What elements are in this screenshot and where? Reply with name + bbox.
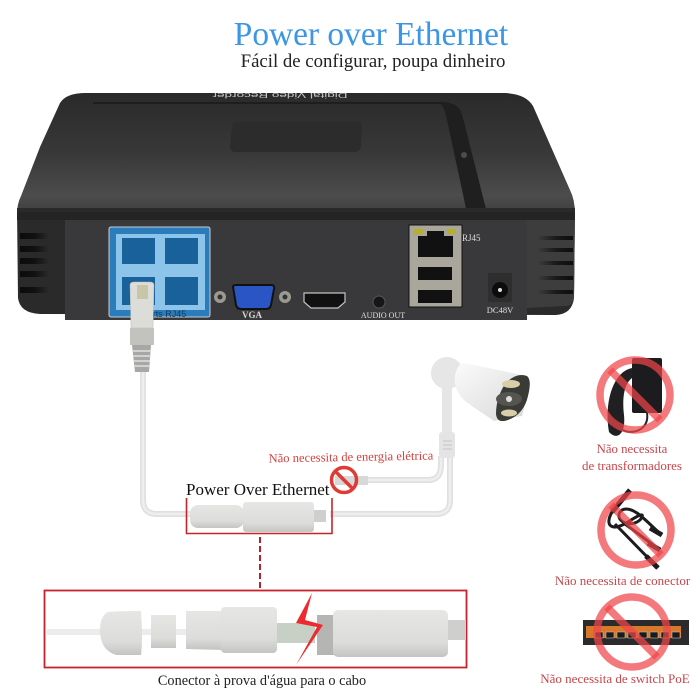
VGA label: VGA [242, 310, 262, 320]
RJ45 plug [130, 282, 154, 372]
icon: splitter cable [609, 490, 662, 568]
recorder back face [65, 220, 527, 320]
waterproof connector panel [44, 590, 466, 668]
subtitle: Fácil de configurar, poupa dinheiro [241, 51, 505, 72]
audio label: AUDIO OUT [361, 311, 405, 320]
waterproof caption: Conector à prova d'água para o cabo [158, 673, 366, 689]
ethernet cable [143, 372, 450, 514]
injector body [333, 610, 448, 657]
sealing nut [100, 611, 142, 655]
icon: prohibition sign [600, 360, 670, 430]
threaded shell [186, 611, 222, 650]
title: Power over Ethernet [234, 16, 509, 53]
dashed connector line [259, 537, 261, 590]
recorder top label: Digital Video Recorder [212, 91, 348, 100]
camera body [455, 363, 530, 421]
DC power jack [488, 273, 512, 302]
right vents [538, 236, 573, 294]
rj45 contacts [277, 623, 315, 643]
ports label: Ports RJ45 [142, 309, 186, 319]
label: Não necessita de switch PoE [540, 671, 690, 686]
label: Não necessita de conector [555, 573, 691, 588]
no power label: Não necessita de energia elétrica [268, 449, 434, 465]
IP camera [431, 357, 530, 432]
NVR recorder [17, 91, 575, 320]
grip body [221, 607, 277, 653]
HDMI port [304, 293, 345, 308]
highlighted PoE ports panel [109, 227, 210, 319]
recorder top cover [17, 93, 575, 214]
PoE label: Power Over Ethernet [186, 480, 330, 499]
label second line: de transformadores [582, 458, 682, 473]
cable coupler [439, 432, 455, 458]
no transformer item [582, 358, 682, 473]
recorder inset line [93, 103, 460, 112]
icon: prohibition sign [601, 495, 671, 565]
recorder side stripe [440, 103, 487, 213]
power indicator [461, 152, 467, 158]
right side panel [527, 214, 575, 308]
VGA port [214, 285, 291, 320]
no power icon [332, 468, 368, 492]
icon: network switch [583, 620, 689, 645]
network and USB stack [409, 225, 462, 307]
camera face [496, 375, 530, 421]
icon: power adapter [632, 358, 662, 413]
DC label: DC48V [487, 305, 514, 315]
injector tail [448, 620, 466, 640]
connector thread [317, 615, 335, 655]
recorder top recess [230, 122, 362, 152]
camera mount [431, 357, 463, 389]
PoE highlight bracket [186, 498, 332, 534]
no connector item [555, 490, 691, 588]
RJ45 label: RJ45 [462, 233, 481, 243]
audio jack [373, 296, 385, 308]
no PoE switch item [540, 597, 690, 686]
recorder side body [17, 208, 575, 315]
red lightning bolt [296, 593, 323, 665]
thin cable [47, 629, 187, 635]
camera LEDs and lens [502, 380, 520, 388]
dark band [17, 212, 575, 220]
label: Não necessita [597, 442, 668, 456]
icon: prohibition sign [597, 597, 667, 667]
rubber seal [151, 615, 176, 648]
PoE adapter [190, 502, 326, 532]
left vents [20, 233, 50, 293]
